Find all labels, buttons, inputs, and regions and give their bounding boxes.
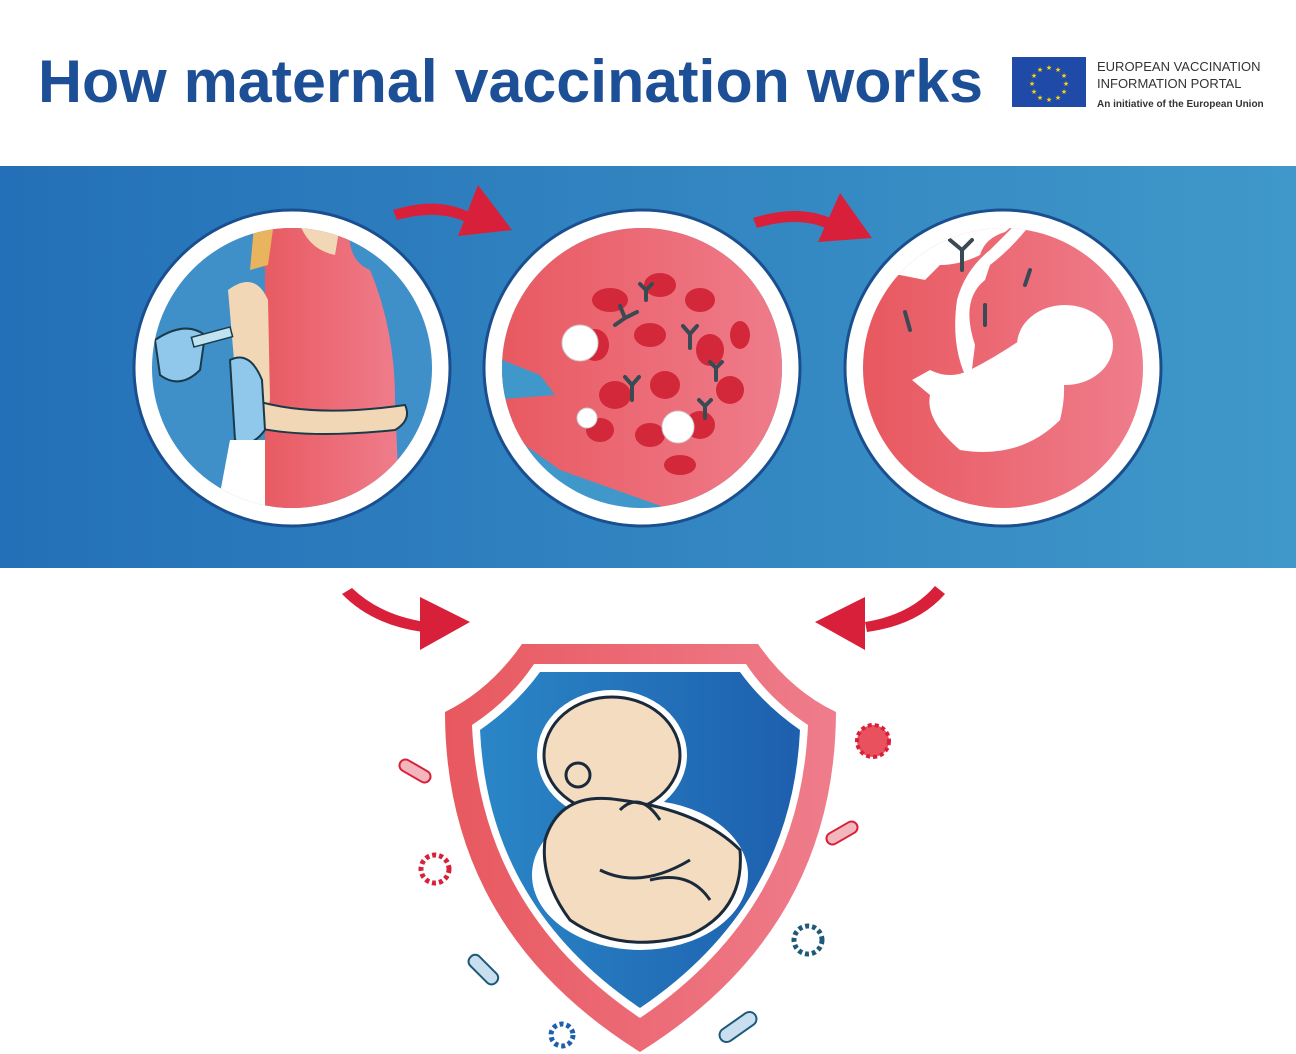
logo: EU flag and portal name: ★ — [1031, 88, 1037, 96]
shield with baby — [445, 644, 836, 1052]
arrow: step 1 to 2 — [393, 185, 512, 236]
circle 3: womb with fetus and antibodies — [845, 210, 1161, 526]
logo: EU flag and portal name: EUROPEAN VACCINATION — [1097, 59, 1260, 74]
germs around shield — [397, 725, 889, 1046]
circle 1: vaccination of pregnant woman — [134, 210, 450, 526]
logo: EU flag and portal name: ★ — [1055, 94, 1061, 102]
logo: EU flag and portal name — [1012, 57, 1264, 110]
logo: EU flag and portal name: ★ — [1055, 66, 1061, 74]
logo: EU flag and portal name: ★ — [1061, 88, 1067, 96]
logo: EU flag and portal name: ★ — [1046, 64, 1052, 72]
baby — [532, 690, 748, 950]
logo: EU flag and portal name: ★ — [1037, 94, 1043, 102]
logo: EU flag and portal name: ★ — [1063, 80, 1069, 88]
arrow: step 2 to 3 — [753, 193, 872, 242]
panel: blue band — [0, 166, 1296, 568]
logo: EU flag and portal name: An initiative of the European Union — [1097, 99, 1264, 110]
logo: EU flag and portal name: INFORMATION PORTAL — [1097, 76, 1241, 91]
logo: EU flag and portal name: ★ — [1031, 72, 1037, 80]
logo: EU flag and portal name: ★ — [1046, 96, 1052, 104]
arrow: right down to shield — [815, 586, 945, 650]
logo: EU flag and portal name: ★ — [1037, 66, 1043, 74]
arrow: left down to shield — [342, 588, 470, 650]
circle 2: blood with antibodies — [484, 210, 800, 526]
title: How maternal vaccination works — [38, 48, 983, 115]
logo: EU flag and portal name: ★ — [1061, 72, 1067, 80]
logo: EU flag and portal name: ★ — [1029, 80, 1035, 88]
